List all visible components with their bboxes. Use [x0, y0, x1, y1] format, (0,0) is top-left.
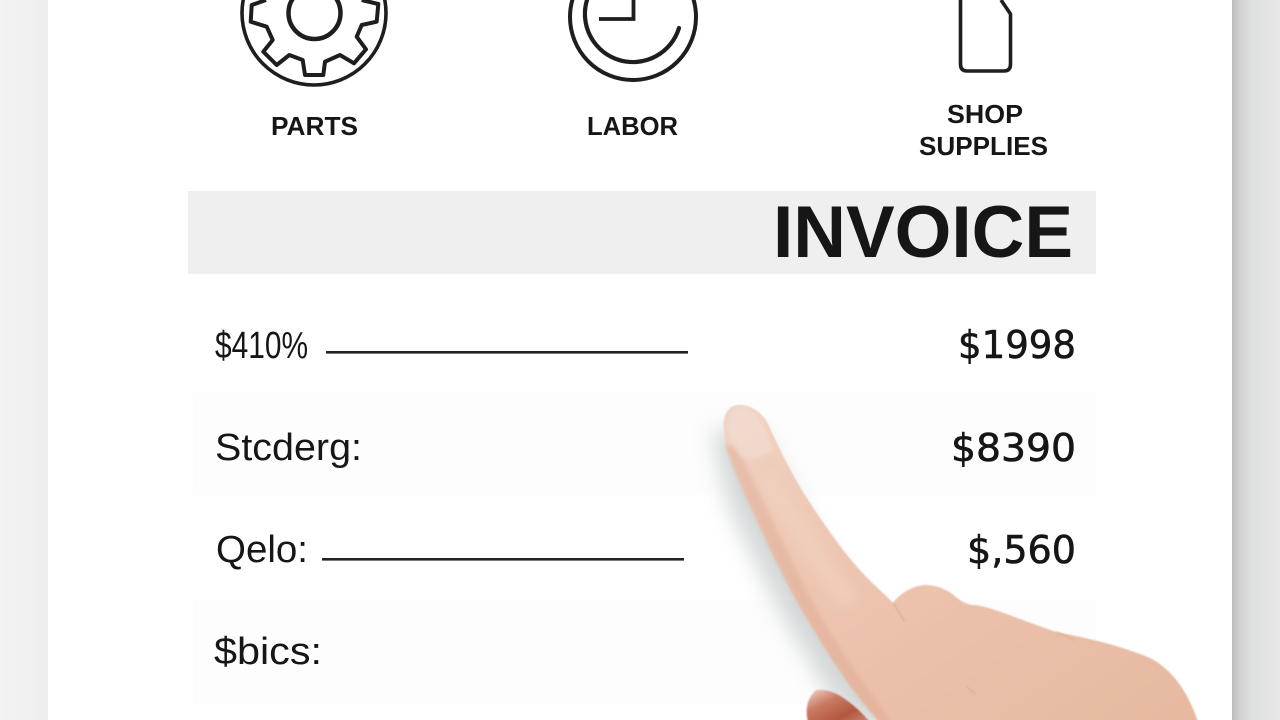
row 1 — [215, 323, 1076, 367]
row 3: Qelo: — [216, 529, 308, 571]
row shading 2 — [193, 393, 1096, 495]
icon: clock (labor) — [570, 0, 696, 80]
background left — [0, 0, 48, 720]
fold between fingers — [893, 603, 1075, 694]
label: shop supplies: SUPPLIES — [919, 131, 1048, 161]
row 1: $1998 — [958, 323, 1076, 367]
row 4: $bics: — [214, 631, 322, 673]
label: parts: PARTS — [271, 111, 358, 141]
thumb tip — [807, 690, 870, 720]
row shading 4 — [193, 600, 1096, 705]
invoice header band — [188, 191, 1096, 274]
label: shop supplies: SHOP — [947, 99, 1023, 129]
row 1: $410% — [215, 325, 308, 367]
hand — [724, 405, 1198, 720]
row 3: $,560 — [967, 528, 1076, 572]
hand shadow — [712, 430, 940, 720]
heading: invoice: INVOICE — [773, 192, 1073, 273]
label: labor: LABOR — [587, 111, 678, 141]
row 2: $8390 — [951, 426, 1076, 470]
highlight along finger — [760, 470, 860, 610]
row 3 — [216, 528, 1076, 572]
row 2 — [215, 426, 1076, 470]
icon: bottle (shop supplies) — [960, 0, 1010, 71]
background right — [1232, 0, 1280, 720]
icon: gear (parts) — [242, 0, 386, 85]
label: shop supplies — [919, 99, 1048, 161]
finger left edge shading — [725, 445, 892, 720]
fingernail — [727, 407, 773, 459]
row 2: Stcderg: — [215, 427, 362, 469]
